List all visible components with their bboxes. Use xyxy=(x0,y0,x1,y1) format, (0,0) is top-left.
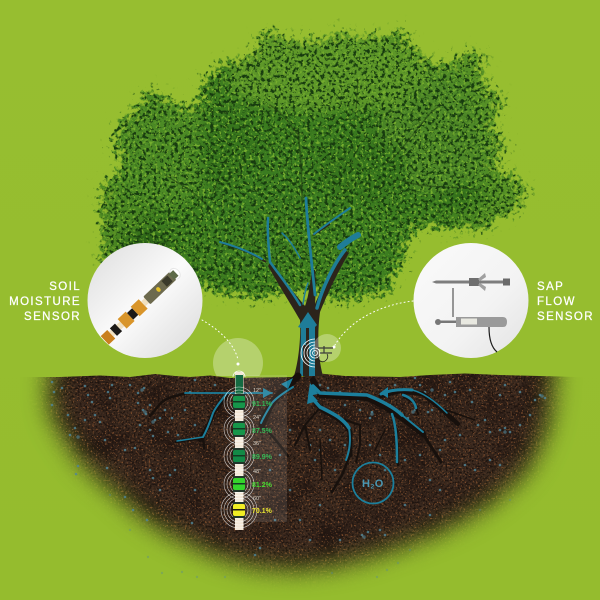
sap sensor halo xyxy=(313,334,341,362)
H2O callout xyxy=(352,462,394,504)
depth labels: 48" xyxy=(253,469,261,475)
probe body xyxy=(235,372,244,530)
depth labels xyxy=(253,388,261,502)
water droplets in soil xyxy=(52,378,545,577)
icon: sap flow probe xyxy=(435,288,507,352)
sap flow sensor disc xyxy=(414,243,528,358)
sensor 2 xyxy=(233,421,245,437)
label: soil moisture sensor xyxy=(9,281,81,323)
moisture readings: 70.1% xyxy=(252,508,273,515)
sensor rings xyxy=(221,387,257,528)
label: sap flow sensor xyxy=(537,281,594,323)
tree canopy xyxy=(96,30,530,303)
icon: sap flow bolt xyxy=(432,273,510,291)
sap root layer xyxy=(177,386,447,462)
soil moisture sensor disc xyxy=(88,243,202,358)
dotted connector: soil sensor xyxy=(202,320,240,366)
depth labels: 24" xyxy=(253,415,261,421)
moisture readings: 81.2% xyxy=(252,482,273,489)
depth labels: 36" xyxy=(253,441,261,447)
H2O callout: 2 xyxy=(371,484,375,490)
icon: soil moisture sensor xyxy=(100,266,183,345)
translucent readout panel xyxy=(240,375,287,522)
probe head xyxy=(236,375,243,395)
H2O callout: O xyxy=(375,478,384,490)
sensor 4 xyxy=(233,476,245,492)
sap branches xyxy=(220,198,358,308)
moisture readings: 91.1% xyxy=(252,401,273,408)
canopy branches xyxy=(165,80,480,215)
soil moisture probe xyxy=(221,371,287,530)
depth labels: 12" xyxy=(253,388,261,394)
moisture readings: 87.5% xyxy=(252,428,273,435)
sensor 3 xyxy=(233,448,245,464)
root arrowheads xyxy=(263,378,388,404)
dotted connector: sap sensor xyxy=(332,301,413,348)
depth labels: 60" xyxy=(253,496,261,502)
label: sap flow sensor: SAP xyxy=(537,281,564,293)
sensor 5 xyxy=(233,502,245,518)
sensor 1 xyxy=(233,394,245,410)
soil sensor halo xyxy=(213,338,263,376)
moisture readings xyxy=(252,401,273,515)
tree trunk and branches xyxy=(220,198,358,376)
moisture readings: 89.9% xyxy=(252,454,273,461)
H2O callout: H xyxy=(362,478,371,490)
label: soil moisture sensor: SENSOR xyxy=(24,311,81,323)
small sap flow sensor with signal rings xyxy=(301,339,333,367)
label: sap flow sensor: FLOW xyxy=(537,296,576,308)
label: sap flow sensor: SENSOR xyxy=(537,311,594,323)
dark root layer xyxy=(150,376,475,492)
soil xyxy=(30,374,572,588)
sap arrow in trunk xyxy=(298,312,317,376)
label: soil moisture sensor: MOISTURE xyxy=(9,296,81,308)
label: soil moisture sensor: SOIL xyxy=(49,281,81,293)
roots xyxy=(150,376,475,492)
